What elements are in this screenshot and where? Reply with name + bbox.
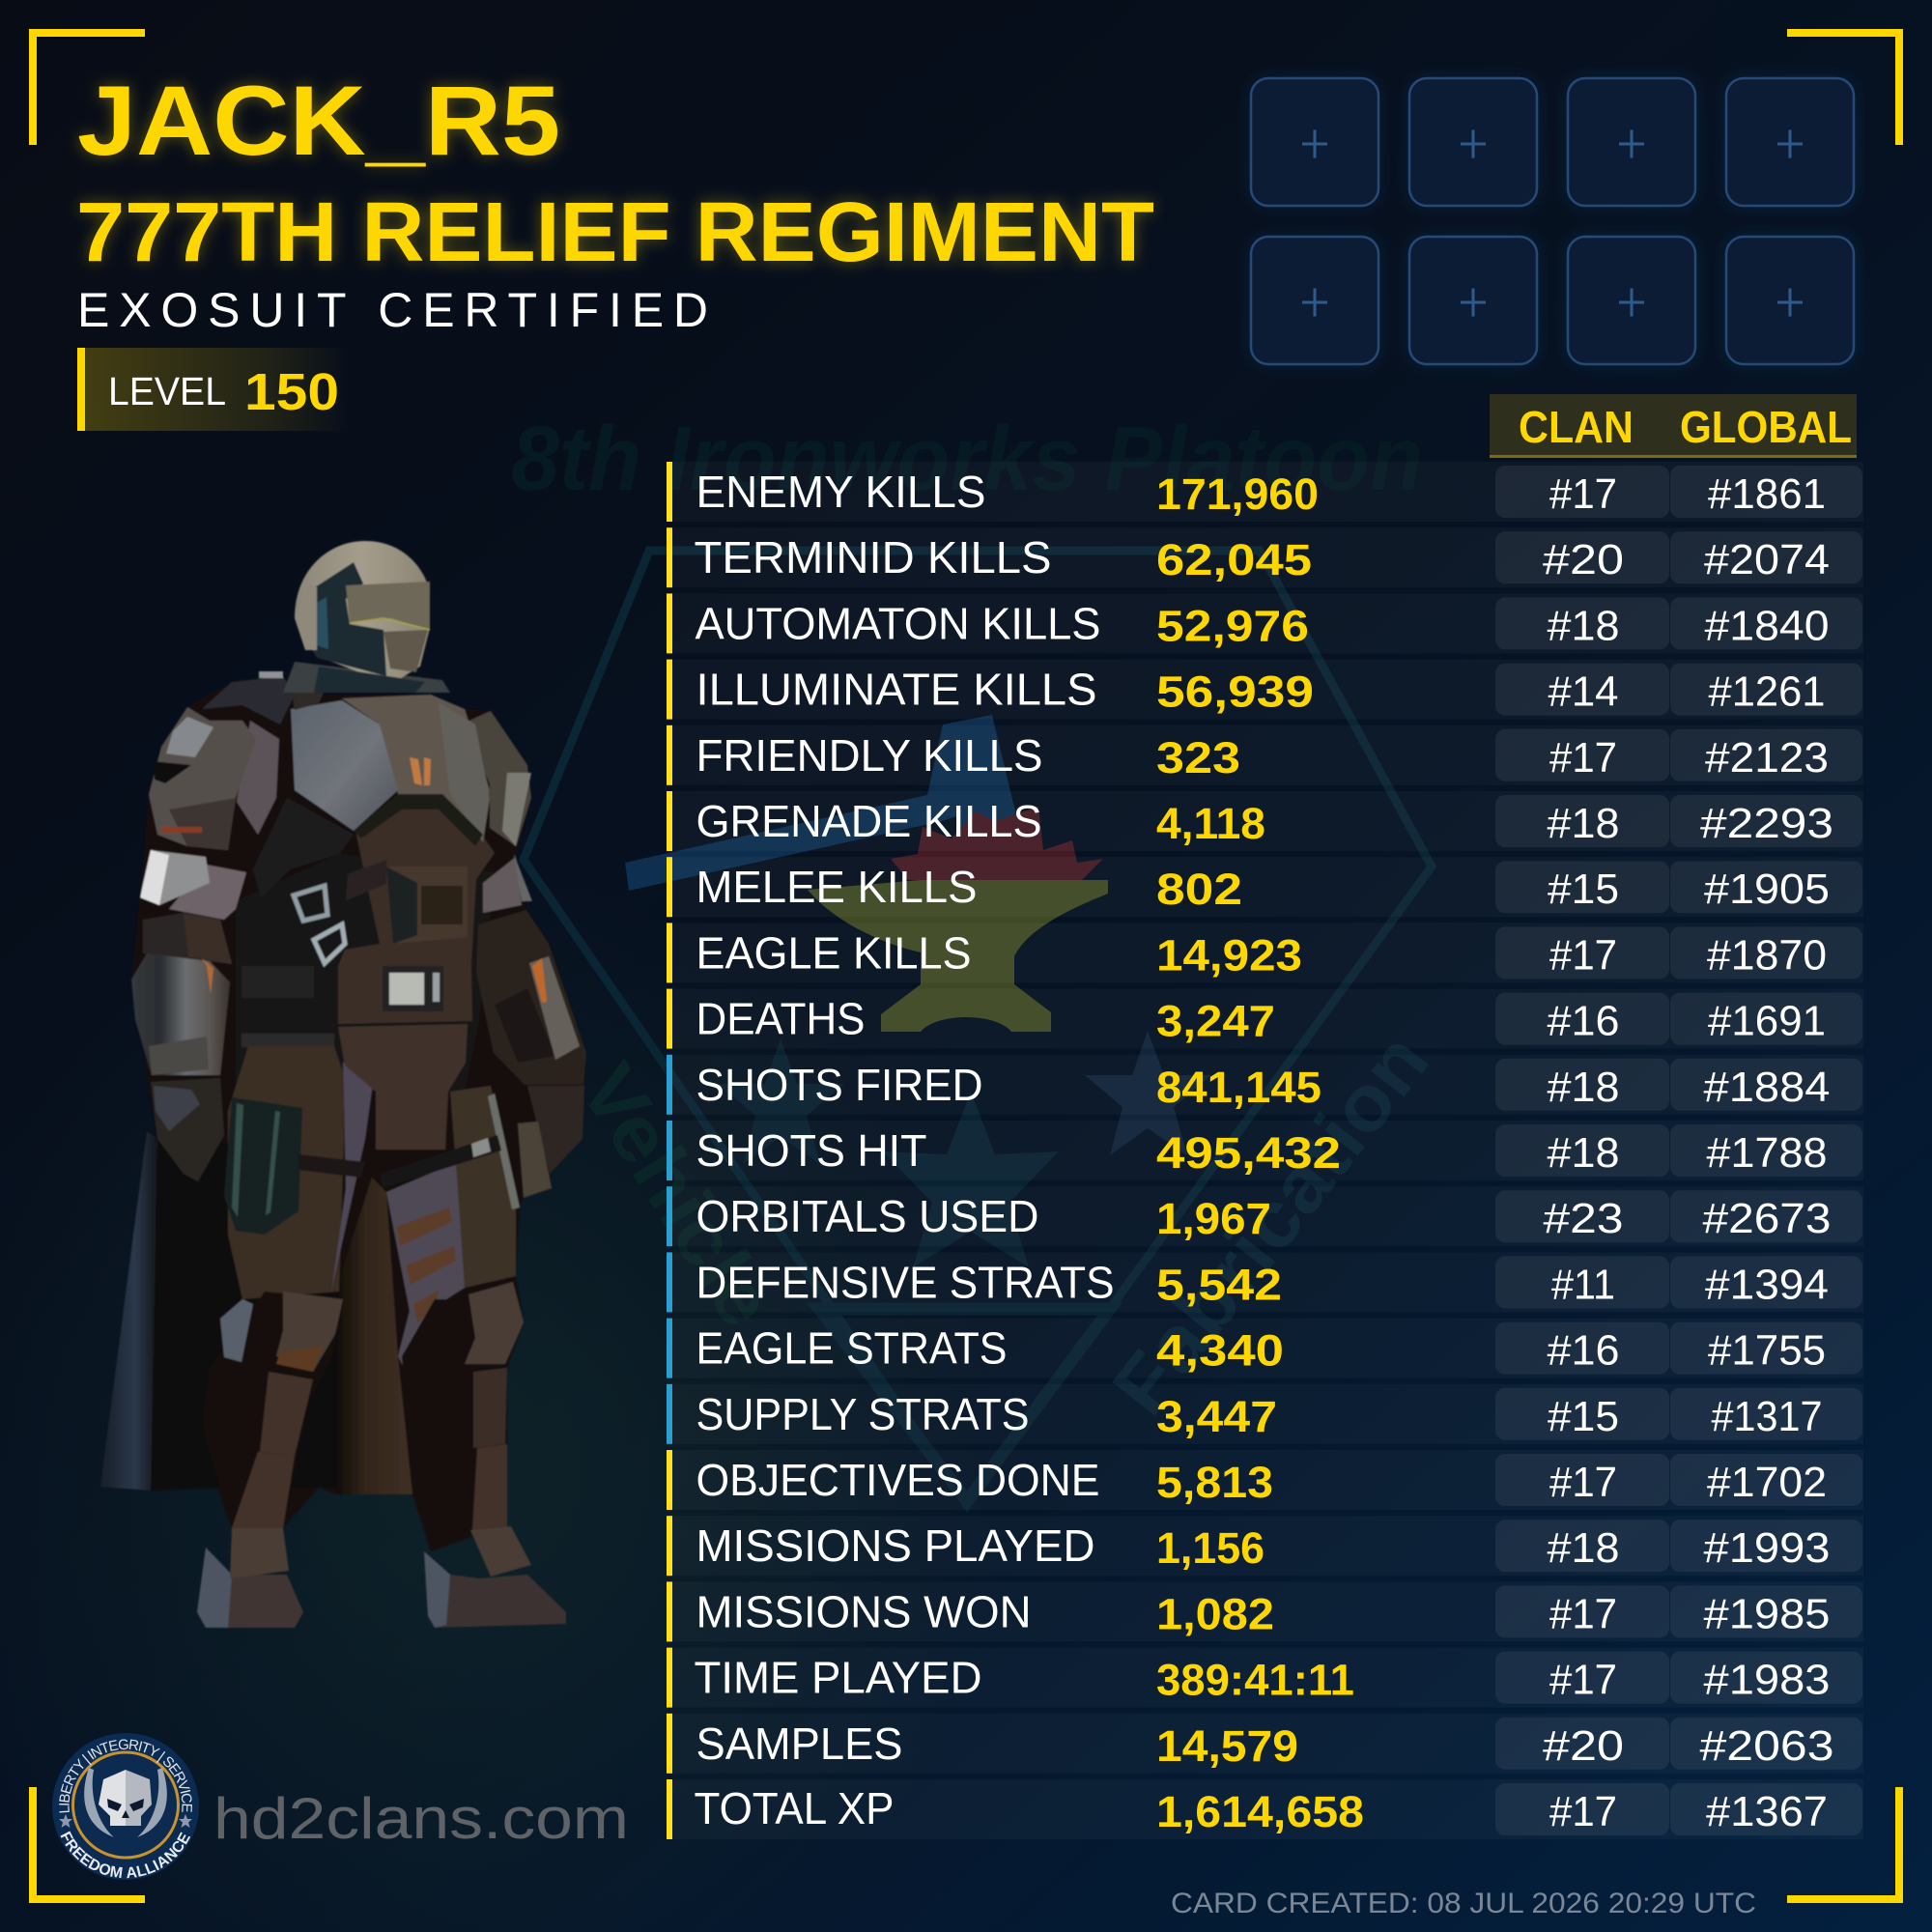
row: eagle kills: EAGLE KILLS bbox=[696, 927, 972, 978]
row: missions played: 1,156 bbox=[1156, 1523, 1264, 1573]
row: eagle kills bbox=[667, 923, 1863, 982]
row: defensive strats: #1394 bbox=[1705, 1261, 1829, 1308]
row: orbitals used bbox=[667, 1186, 1863, 1246]
row: supply strats: #15 bbox=[1548, 1393, 1619, 1440]
watermark star large bbox=[883, 1092, 1059, 1267]
row: defensive strats: DEFENSIVE STRATS bbox=[696, 1257, 1115, 1307]
row: melee kills: #15 bbox=[1548, 866, 1619, 913]
row: shots hit: SHOTS HIT bbox=[696, 1125, 927, 1176]
row: missions won: #1985 bbox=[1704, 1590, 1830, 1637]
flame bbox=[891, 807, 1103, 880]
row: defensive strats: 5,542 bbox=[1156, 1260, 1282, 1309]
row: defensive strats: #11 bbox=[1551, 1261, 1615, 1308]
row: objectives done: 5,813 bbox=[1156, 1458, 1273, 1507]
row: grenade kills: GRENADE KILLS bbox=[696, 796, 1041, 846]
row: shots fired: #1884 bbox=[1704, 1064, 1830, 1111]
emblem bottom text: FREEDOM ALLIANCE bbox=[60, 1832, 191, 1878]
left boot bbox=[197, 1548, 303, 1628]
clan header: CLAN bbox=[1519, 402, 1634, 452]
achievement slots grid bbox=[1251, 78, 1854, 364]
row: objectives done: OBJECTIVES DONE bbox=[696, 1455, 1099, 1505]
left shin bbox=[202, 1292, 343, 1528]
row: terminid kills: #2074 bbox=[1704, 536, 1830, 583]
row: defensive strats bbox=[667, 1252, 1863, 1312]
chest plates bbox=[342, 695, 490, 835]
corner bracket top-left bbox=[29, 29, 145, 145]
row: total xp: #17 bbox=[1549, 1788, 1617, 1835]
watermark: clan logo bbox=[511, 408, 1446, 1505]
stats table bbox=[667, 462, 1863, 1839]
row: eagle kills: 14,923 bbox=[1156, 930, 1302, 980]
corner bracket top-right bbox=[1787, 29, 1903, 145]
emblem skull bbox=[99, 1770, 126, 1826]
row: melee kills bbox=[667, 857, 1863, 917]
watermark inner triangle bbox=[819, 1309, 1110, 1501]
row: illuminate kills: 56,939 bbox=[1156, 668, 1314, 717]
watermark shield outline bbox=[524, 551, 1432, 1505]
row: shots hit bbox=[667, 1121, 1863, 1180]
row: deaths: 3,247 bbox=[1156, 997, 1275, 1046]
row: total xp bbox=[667, 1779, 1863, 1839]
row: orbitals used: 1,967 bbox=[1156, 1194, 1271, 1243]
row: eagle strats: #16 bbox=[1548, 1327, 1619, 1375]
level badge bbox=[77, 348, 351, 431]
row: objectives done: #1702 bbox=[1707, 1459, 1827, 1506]
row: enemy kills: #1861 bbox=[1708, 470, 1826, 518]
row: deaths: #1691 bbox=[1708, 998, 1826, 1045]
row: supply strats: SUPPLY STRATS bbox=[696, 1389, 1030, 1439]
cape bbox=[151, 1130, 319, 1491]
row: enemy kills: 171,960 bbox=[1156, 469, 1319, 519]
row: eagle kills: #17 bbox=[1549, 931, 1617, 979]
row: missions played: #1993 bbox=[1704, 1524, 1830, 1572]
row: illuminate kills: #14 bbox=[1548, 668, 1619, 716]
row: shots fired: 841,145 bbox=[1156, 1063, 1321, 1112]
certification: EXOSUIT CERTIFIED bbox=[77, 283, 708, 337]
table header: clan and global bbox=[1490, 394, 1857, 458]
row: deaths: DEATHS bbox=[696, 994, 866, 1044]
row: eagle kills: #1870 bbox=[1707, 931, 1827, 979]
emblem top text: LIBERTY | INTEGRITY | SERVICE bbox=[59, 1739, 192, 1812]
row: illuminate kills: #1261 bbox=[1708, 668, 1826, 716]
emblem stars bbox=[59, 1814, 192, 1828]
row: orbitals used: #23 bbox=[1544, 1195, 1623, 1242]
row: grenade kills: #18 bbox=[1548, 800, 1619, 847]
watermark name: 8th Ironworks Platoon bbox=[511, 408, 1423, 510]
hammer bbox=[625, 715, 1026, 891]
watermark text right: Fabrication bbox=[1095, 1017, 1446, 1431]
watermark star right bbox=[1085, 1031, 1211, 1155]
row: melee kills: MELEE KILLS bbox=[696, 862, 978, 912]
watermark star left bbox=[718, 1038, 844, 1164]
row: illuminate kills bbox=[667, 660, 1863, 720]
row: deaths bbox=[667, 989, 1863, 1049]
row: objectives done: #17 bbox=[1549, 1459, 1617, 1506]
camo cloth bbox=[331, 1063, 376, 1292]
right arm bbox=[483, 857, 522, 913]
row: missions played: MISSIONS PLAYED bbox=[696, 1520, 1095, 1571]
row: automaton kills: AUTOMATON KILLS bbox=[696, 598, 1101, 648]
row: shots fired: #18 bbox=[1548, 1064, 1619, 1111]
anvil bbox=[808, 880, 1108, 1032]
row: total xp: TOTAL XP bbox=[694, 1783, 895, 1833]
row: shots hit: #1788 bbox=[1706, 1129, 1828, 1177]
level label: LEVEL bbox=[108, 369, 226, 413]
row: grenade kills bbox=[667, 791, 1863, 851]
row: enemy kills bbox=[667, 462, 1863, 522]
right boot bbox=[424, 1551, 566, 1628]
row: eagle strats: 4,340 bbox=[1156, 1326, 1284, 1376]
row: time played: #1983 bbox=[1704, 1657, 1830, 1704]
row: total xp: 1,614,658 bbox=[1156, 1787, 1364, 1836]
row: shots fired bbox=[667, 1055, 1863, 1115]
thigh straps bbox=[298, 1154, 365, 1178]
row: supply strats: 3,447 bbox=[1156, 1392, 1277, 1441]
row: total xp: #1367 bbox=[1706, 1788, 1828, 1835]
row: deaths: #16 bbox=[1548, 998, 1619, 1045]
left shoulder bbox=[202, 676, 295, 724]
row: terminid kills bbox=[667, 527, 1863, 587]
row: eagle strats: #1755 bbox=[1708, 1327, 1826, 1375]
row: missions won bbox=[667, 1581, 1863, 1641]
chest rig bbox=[338, 792, 495, 1024]
row: samples: 14,579 bbox=[1156, 1721, 1298, 1771]
helmet bbox=[295, 541, 430, 678]
row: melee kills: #1905 bbox=[1704, 866, 1830, 913]
row: terminid kills: TERMINID KILLS bbox=[694, 532, 1051, 582]
watermark text left: Vehicle bbox=[563, 1049, 791, 1342]
row: orbitals used: #2673 bbox=[1702, 1195, 1832, 1242]
row: missions won: #17 bbox=[1549, 1590, 1617, 1637]
row: missions won: MISSIONS WON bbox=[696, 1586, 1032, 1636]
site url: hd2clans.com bbox=[213, 1786, 629, 1851]
row: time played: TIME PLAYED bbox=[694, 1653, 981, 1703]
undersuit torso bbox=[236, 854, 495, 1092]
row: shots fired: SHOTS FIRED bbox=[696, 1060, 983, 1110]
neck ring bbox=[283, 662, 450, 693]
corner bracket bottom-right bbox=[1787, 1787, 1903, 1903]
player name: JACK_R5 bbox=[77, 66, 560, 176]
row: objectives done bbox=[667, 1450, 1863, 1510]
left forearm and glove bbox=[143, 913, 232, 964]
row: friendly kills: #2123 bbox=[1705, 734, 1829, 781]
row: friendly kills bbox=[667, 725, 1863, 785]
emblem laurels bbox=[84, 1768, 167, 1837]
global header: GLOBAL bbox=[1680, 402, 1852, 452]
row: samples: SAMPLES bbox=[696, 1719, 902, 1769]
row: friendly kills: FRIENDLY KILLS bbox=[696, 730, 1043, 781]
left thigh bbox=[228, 1046, 344, 1299]
corner bracket bottom-left bbox=[29, 1787, 145, 1903]
emblem skull eyes bbox=[107, 1799, 144, 1818]
row: missions played: #18 bbox=[1548, 1524, 1619, 1572]
right thigh bbox=[450, 1086, 516, 1288]
row: enemy kills: #17 bbox=[1549, 470, 1617, 518]
row: orbitals used: ORBITALS USED bbox=[696, 1191, 1039, 1241]
row: shots hit: 495,432 bbox=[1156, 1128, 1341, 1178]
row: samples bbox=[667, 1714, 1863, 1774]
row: automaton kills bbox=[667, 593, 1863, 653]
row: missions won: 1,082 bbox=[1156, 1589, 1274, 1638]
row: time played: #17 bbox=[1549, 1657, 1617, 1704]
row: shots hit: #18 bbox=[1548, 1129, 1619, 1177]
row: time played: 389:41:11 bbox=[1156, 1656, 1354, 1705]
thigh pouch bbox=[224, 1097, 302, 1235]
row: samples: #20 bbox=[1543, 1722, 1624, 1770]
row: eagle strats: EAGLE STRATS bbox=[696, 1323, 1007, 1374]
right shin bbox=[402, 1299, 507, 1551]
row: melee kills: 802 bbox=[1156, 865, 1242, 914]
row: enemy kills: ENEMY KILLS bbox=[696, 467, 985, 517]
row: automaton kills: #1840 bbox=[1704, 602, 1830, 649]
row: terminid kills: #20 bbox=[1543, 536, 1624, 583]
row: missions played bbox=[667, 1516, 1863, 1576]
clan name: 777TH RELIEF REGIMENT bbox=[76, 185, 1154, 279]
row: supply strats: #1317 bbox=[1712, 1393, 1822, 1440]
row: time played bbox=[667, 1648, 1863, 1708]
row: friendly kills: 323 bbox=[1156, 733, 1240, 782]
row: illuminate kills: ILLUMINATE KILLS bbox=[696, 665, 1097, 715]
row: automaton kills: #18 bbox=[1548, 602, 1619, 649]
row: eagle strats bbox=[667, 1319, 1863, 1378]
row: automaton kills: 52,976 bbox=[1156, 601, 1309, 650]
row: friendly kills: #17 bbox=[1549, 734, 1617, 781]
row: terminid kills: 62,045 bbox=[1156, 535, 1312, 584]
emblem skull shadow side bbox=[126, 1770, 152, 1826]
card created date: CARD CREATED: 08 JUL 2026 20:29 UTC bbox=[1171, 1888, 1756, 1919]
row: grenade kills: #2293 bbox=[1700, 800, 1833, 847]
row: samples: #2063 bbox=[1700, 1722, 1833, 1770]
silhouette base bbox=[131, 676, 586, 1551]
emblem: freedom alliance bbox=[52, 1733, 199, 1880]
level value: 150 bbox=[244, 363, 339, 421]
character: armored soldier bbox=[100, 541, 586, 1628]
row: supply strats bbox=[667, 1384, 1863, 1444]
chest straps and buckles bbox=[253, 798, 354, 898]
row: grenade kills: 4,118 bbox=[1156, 799, 1265, 848]
